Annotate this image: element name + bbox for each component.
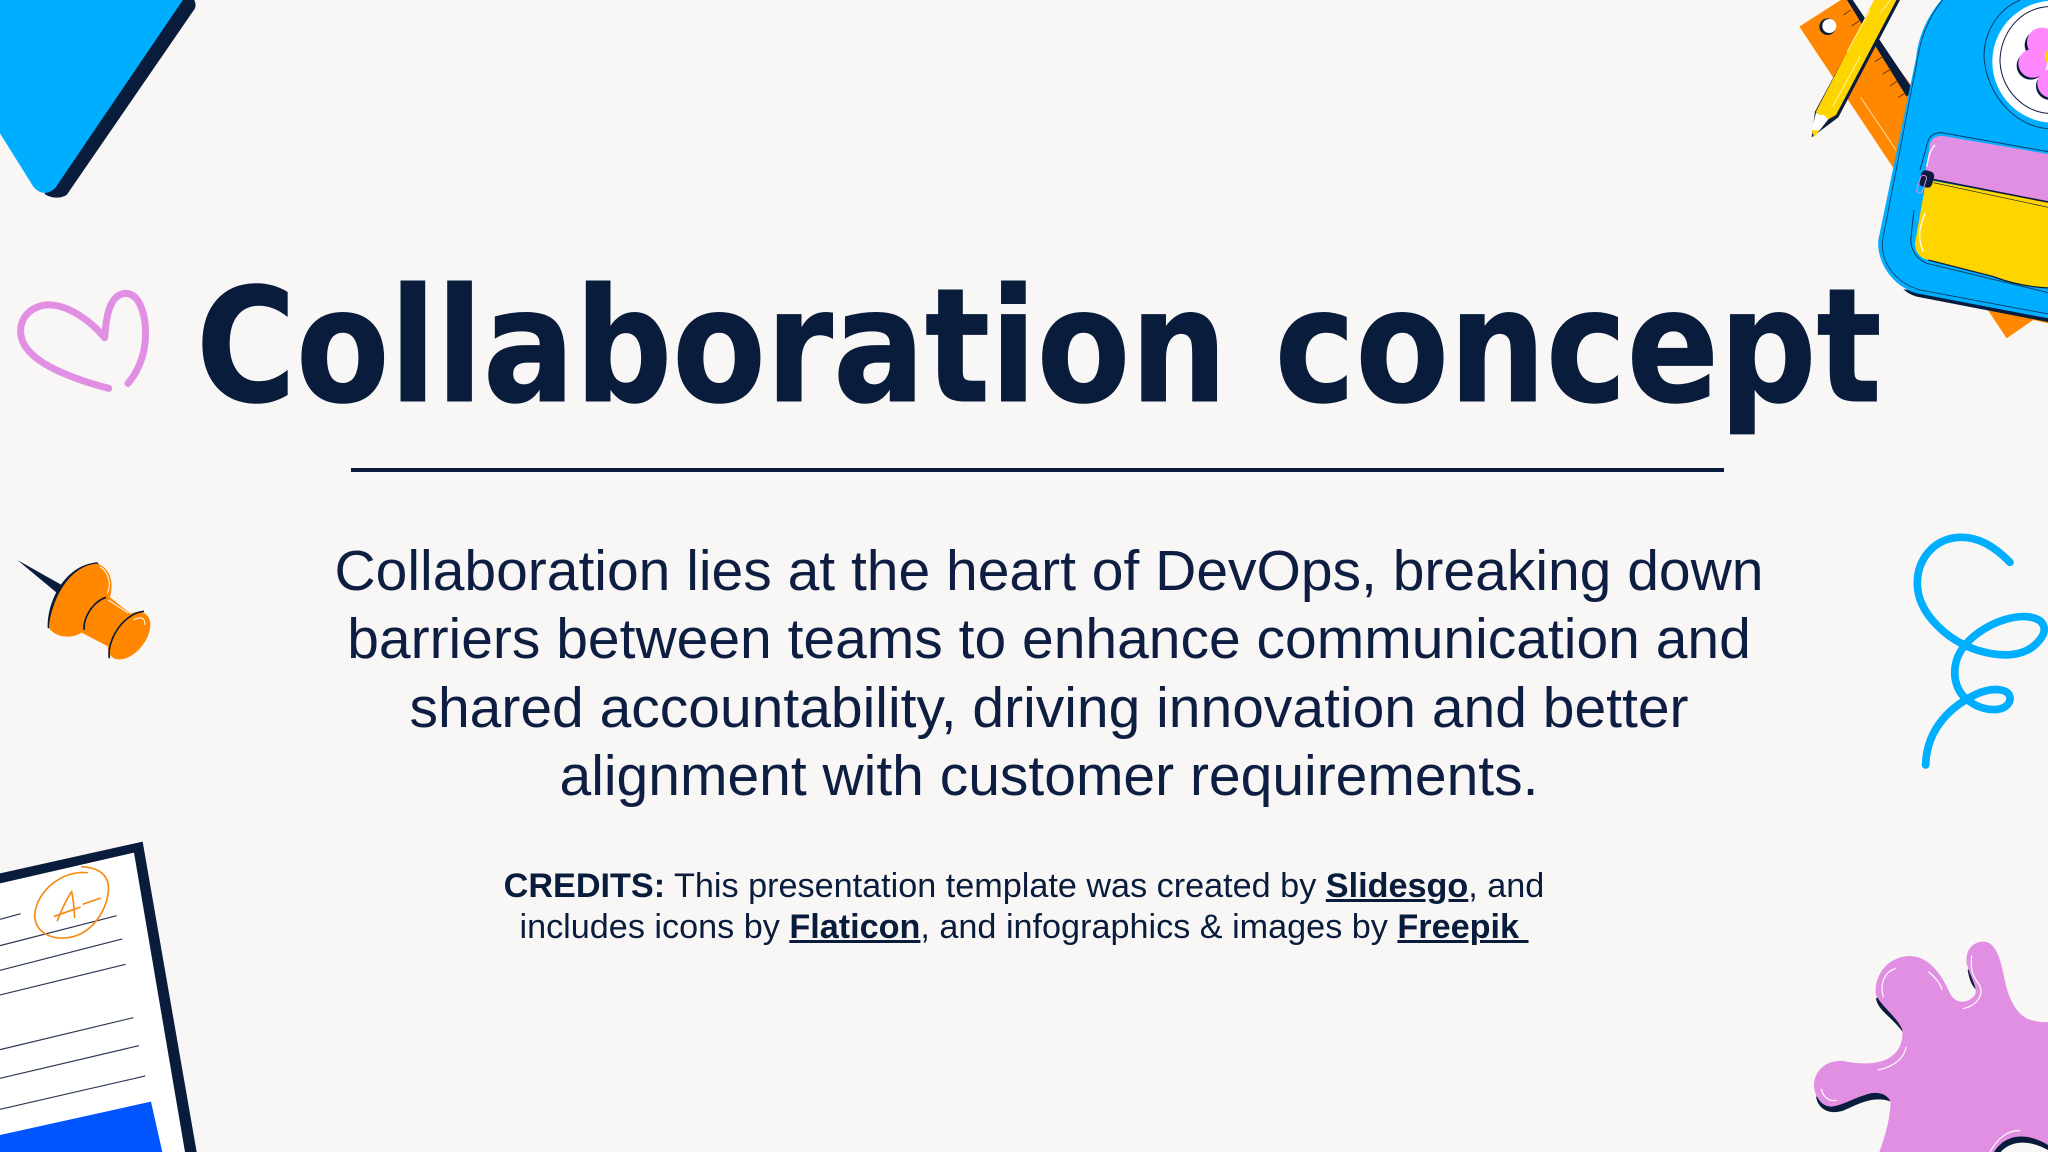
credits text: CREDITS: This presentation template was created by Slidesgo, and: [504, 867, 1544, 905]
credits text: [504, 867, 1544, 946]
front pocket: [1911, 133, 2048, 293]
icon: blue backpack: [1878, 0, 2048, 322]
divider line: [351, 468, 1724, 472]
body text block: Collaboration lies at the heart of DevOps, breaking down: [334, 539, 1763, 603]
body text block: shared accountability, driving innovation and better: [409, 676, 1689, 740]
icon: orange push pin: [17, 560, 159, 667]
body text block: barriers between teams to enhance communication and: [347, 607, 1751, 671]
credits text: includes icons by Flaticon, and infographics & images by Freepik: [519, 908, 1519, 946]
icon: yellow pencil: [1812, 0, 1900, 137]
flower badge: [1990, 1, 2048, 123]
icon: blue squiggle: [1917, 537, 2044, 765]
grade mark: [35, 867, 108, 938]
icon: pink paint splat: [1814, 942, 2048, 1152]
icon: graded paper: [0, 842, 197, 1152]
body text block: [334, 539, 1763, 808]
body text block: alignment with customer requirements.: [560, 744, 1538, 808]
icon: orange ruler: [1799, 0, 2048, 338]
icon: blue notebook corner: [0, 0, 196, 198]
title: Collaboration concept: [196, 255, 1882, 439]
icon: pink hand-drawn heart: [21, 293, 146, 388]
